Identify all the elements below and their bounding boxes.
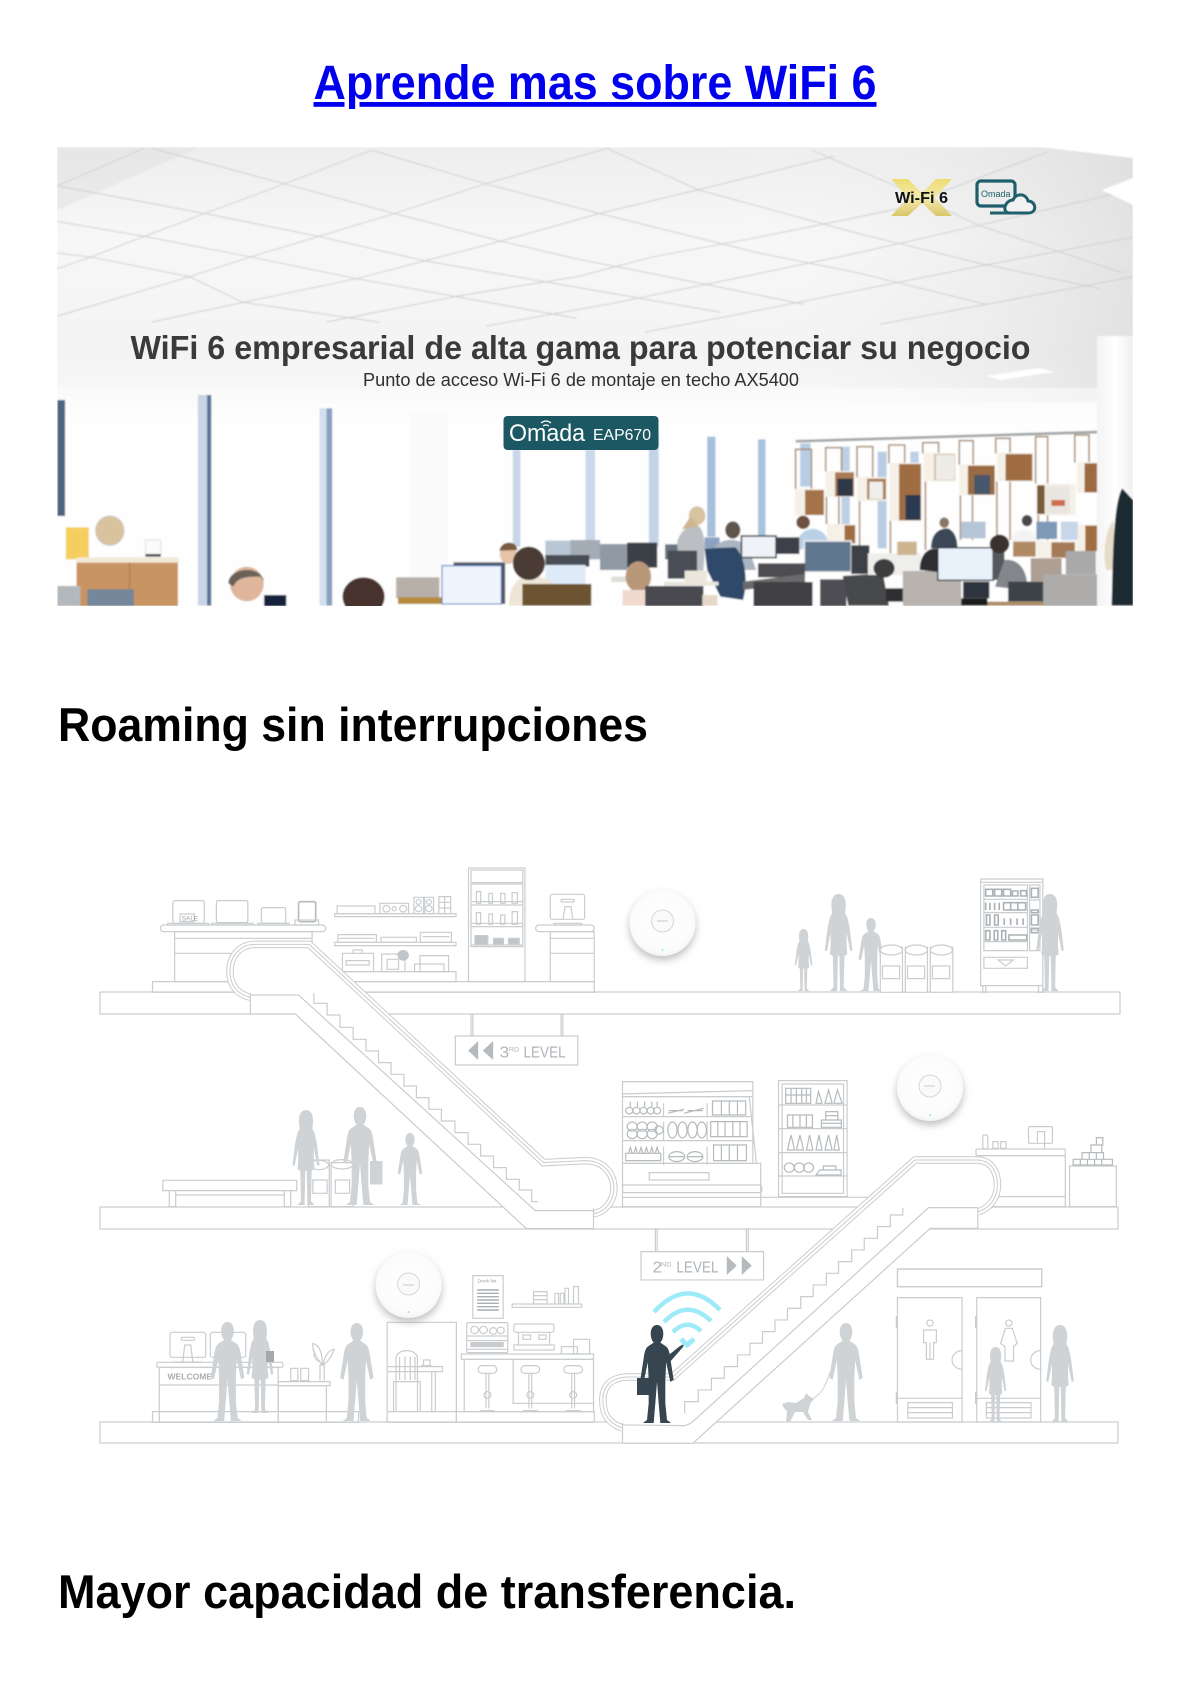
shops second level [622, 1081, 1116, 1207]
reception and cafe first level: WELCOME [167, 1372, 212, 1381]
circle sign: 3rd level: 3 [500, 1043, 509, 1061]
diagram: roaming across mall floors [100, 868, 1120, 1443]
people second level [292, 1107, 422, 1205]
silhouettes third level [795, 894, 883, 991]
circle sign: 2nd level: ND [661, 1261, 671, 1268]
photo: office ceiling, windows and desks [57, 147, 1133, 616]
panel: office banner photo [57, 147, 1133, 616]
person at vending machine [1036, 894, 1064, 991]
access point second level [897, 1055, 963, 1121]
vending machine [981, 879, 1043, 992]
headline: WiFi 6 empresarial de alta gama para potenciar su negocio [130, 329, 1030, 366]
access point first level [376, 1252, 442, 1318]
people first level left [211, 1320, 373, 1421]
title link: Aprende mas sobre WiFi 6 [314, 57, 876, 110]
highlighted user with phone and briefcase [637, 1325, 684, 1423]
people, dog first level right [782, 1323, 1074, 1422]
reception and cafe first level: Drink list [477, 1279, 497, 1285]
circle sign: 3rd level: LEVEL [524, 1043, 566, 1061]
floor slabs [100, 992, 1120, 1443]
circle sign: 3rd level: RD [509, 1046, 519, 1053]
circle sign: 3rd level [455, 1014, 578, 1065]
logo: Wi-Fi 6: Wi-Fi 6 [895, 190, 948, 207]
bench and bins second level [163, 1160, 353, 1207]
access point third level [630, 890, 696, 956]
bins third level [880, 945, 953, 992]
reception and cafe first level [152, 1276, 594, 1422]
badge: Omada EAP670 [504, 416, 658, 450]
circle sign: 2nd level [641, 1228, 764, 1280]
heading: Roaming sin interrupciones: Roaming sin interrupciones [58, 698, 648, 751]
icon: wifi signal [654, 1293, 720, 1345]
badge: Omada EAP670: Omada [509, 420, 586, 447]
logo: Wi-Fi 6 [891, 179, 952, 216]
circle sign: 2nd level: 2 [652, 1258, 662, 1276]
electronics store third level [152, 868, 594, 992]
toilets first level [897, 1269, 1042, 1422]
escalator from first to second level [601, 1157, 999, 1443]
badge: Omada EAP670: EAP670 [593, 427, 651, 444]
electronics store third level: SALE [182, 916, 198, 922]
subheadline: Punto de acceso Wi-Fi 6 de montaje en techo AX5400 [363, 370, 799, 390]
circle sign: 2nd level: LEVEL [676, 1258, 719, 1276]
logo: Omada cloud: Omada [981, 189, 1011, 199]
escalator from second to third level [228, 943, 616, 1229]
logo: Omada cloud [977, 181, 1035, 213]
heading: Mayor capacidad de transferencia.: Mayor capacidad de transferencia. [58, 1565, 796, 1618]
